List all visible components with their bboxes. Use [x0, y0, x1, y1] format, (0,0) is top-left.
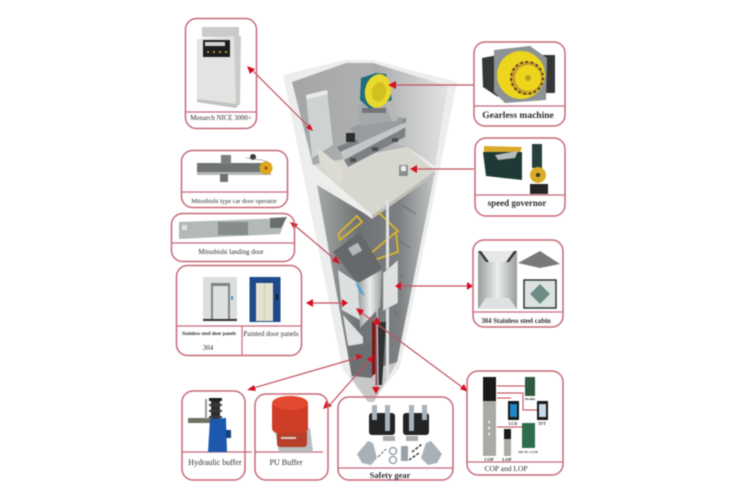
label: painted: Painted door panels [243, 330, 299, 338]
icon: stainless steel door [203, 277, 237, 321]
label: Safety gear [370, 470, 411, 480]
label: COP and LOP [484, 464, 528, 473]
icon: PU buffer [272, 396, 313, 452]
icon: safety gear parts [357, 405, 442, 465]
panel: COP and LOP [467, 371, 563, 475]
panel: Mitsubishi type car door operator [182, 150, 288, 208]
arrow: PU buffer [323, 355, 374, 409]
arrow: speed governor [410, 165, 474, 173]
counterweight and guide rail [372, 200, 398, 392]
icon: COP panel [483, 377, 496, 456]
shaft bottom tip [350, 362, 397, 402]
label: 304 Stainless steel cabin [481, 318, 551, 325]
label: 304: 304 [203, 344, 214, 352]
connector wires [497, 386, 537, 427]
arrow: hydraulic buffer [247, 354, 363, 391]
small labels: COP [484, 457, 494, 462]
label: PU Buffer [270, 458, 303, 467]
icon: hydraulic buffer [188, 398, 231, 452]
icon: ceiling [518, 251, 560, 268]
icon: landing door header [179, 217, 287, 239]
arrow: door panels [306, 299, 348, 307]
panel: speed governor [475, 138, 565, 216]
connector arrows [247, 66, 474, 409]
panel: Mitsubishi landing door [172, 214, 294, 262]
label: Gearless machine [482, 111, 554, 121]
icon: push button board [525, 377, 535, 396]
small labels: MCTC-CCB [518, 450, 538, 454]
small labels: TFT [538, 421, 546, 426]
concrete beam block [317, 147, 343, 185]
shaft upper back walls [292, 63, 407, 165]
machine room floor slab [314, 147, 435, 215]
small labels: LOP [502, 457, 512, 462]
icon: floor tile [524, 280, 556, 308]
panel: door panels [176, 266, 302, 356]
icon: governor housing [483, 146, 522, 180]
shaft outer walls [283, 60, 457, 402]
controller cabinet in the shaft [306, 90, 333, 158]
wall brackets on the right side [393, 205, 416, 314]
arrow: cabin [395, 282, 473, 290]
icon: painted door [250, 277, 280, 322]
icon: LCD [508, 401, 519, 420]
icon: door operator [197, 154, 272, 182]
speed governor on slab [399, 165, 408, 176]
icon: cabin interior [478, 251, 517, 309]
small labels: Braille [525, 397, 536, 401]
arrow: COP [356, 308, 468, 392]
panel: Hydraulic buffer [182, 391, 252, 480]
gearless machine in shaft [360, 72, 394, 110]
panel: PU Buffer [255, 394, 328, 480]
machine bed frame [337, 98, 406, 167]
icon: gearless traction machine [482, 46, 555, 103]
arrow: controller [247, 66, 313, 131]
shaft lower interior [317, 172, 435, 392]
label: Monarch NICE 3000+ [190, 115, 252, 122]
panel: Gearless machine [474, 42, 565, 126]
panel: 304 Stainless steel cabin [473, 240, 563, 327]
elevator car [333, 232, 382, 378]
label: Mitsubishi type car door operator [191, 198, 278, 205]
arrow: gearless machine [388, 81, 474, 89]
small labels [484, 397, 546, 462]
panel: Monarch NICE 3000+ [186, 18, 256, 128]
small labels: LCD [509, 421, 517, 426]
arrow: landing door [290, 222, 340, 264]
label: stainless: Stainless steel door panels [182, 332, 236, 337]
elevator shaft cutaway [283, 60, 457, 402]
label: Mitsubishi landing door [198, 249, 264, 256]
icon: LOP panel [504, 429, 511, 456]
icon: governor wheel [530, 144, 548, 194]
car top rails in yellow [338, 212, 399, 262]
panel: Safety gear [338, 397, 453, 480]
arrow: safety gear [372, 317, 381, 394]
icon: circuit board [522, 423, 535, 448]
label: speed governor [488, 198, 546, 208]
icon: TFT [537, 401, 548, 420]
label: Hydraulic buffer [188, 458, 242, 467]
icon: control cabinet [197, 27, 241, 108]
